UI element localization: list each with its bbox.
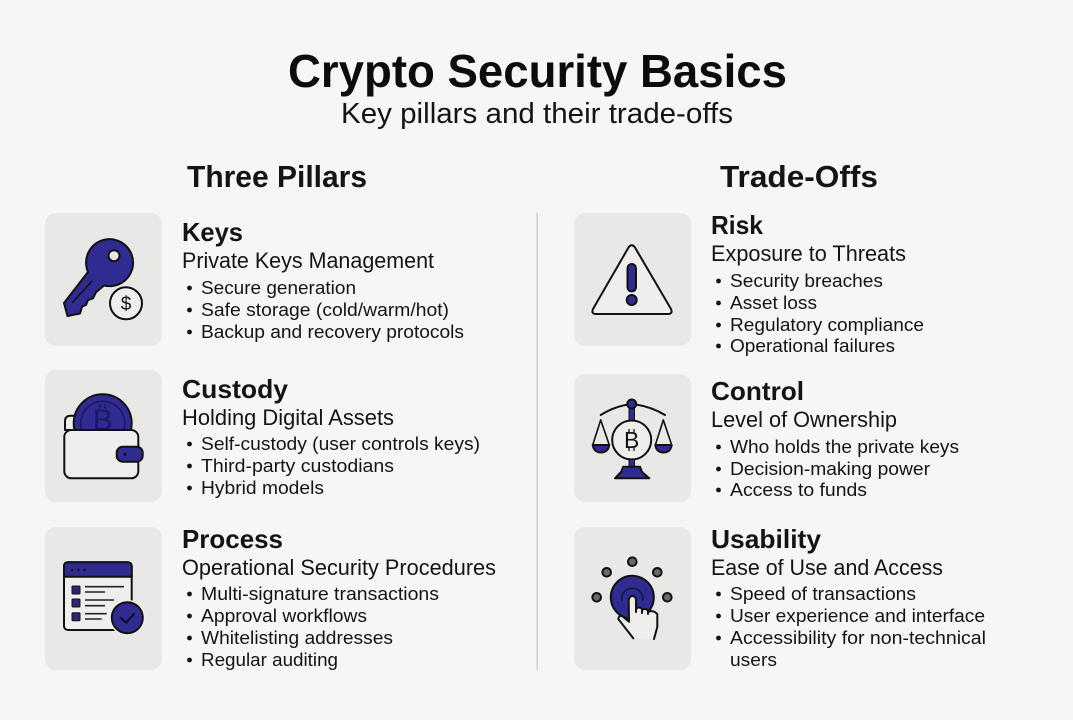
icon: wallet with bitcoin bbox=[45, 370, 162, 502]
icon: wallet with bitcoin: B bbox=[93, 404, 113, 437]
list: control bullets: Access to funds bbox=[730, 479, 867, 500]
icon: scales with bitcoin: B bbox=[624, 427, 639, 453]
icon: checklist window bbox=[45, 527, 162, 670]
list: keys bullets bbox=[187, 277, 464, 342]
panel: usability bbox=[574, 524, 986, 670]
text: process heading: Process bbox=[182, 524, 283, 554]
text: control subtitle: Level of Ownership bbox=[711, 407, 897, 432]
list: custody bullets: Self-custody (user controls keys) bbox=[201, 433, 480, 454]
icon: scales with bitcoin bbox=[574, 374, 691, 502]
list: keys bullets: Backup and recovery protocols bbox=[201, 321, 464, 342]
subtitle: Key pillars and their trade-offs bbox=[341, 98, 733, 130]
list: process bullets: Approval workflows bbox=[201, 605, 367, 626]
text: keys subtitle: Private Keys Management bbox=[182, 248, 434, 273]
list: usability bullets: User experience and interface bbox=[730, 605, 985, 626]
list: control bullets bbox=[716, 436, 959, 500]
text: risk subtitle: Exposure to Threats bbox=[711, 241, 906, 266]
icon: touch button bbox=[574, 527, 691, 670]
list: control bullets: Who holds the private keys bbox=[730, 436, 959, 457]
text: custody heading: Custody bbox=[182, 374, 289, 404]
list: usability bullets: Speed of transactions bbox=[730, 583, 916, 604]
panel: process bbox=[45, 524, 496, 670]
panel: keys bbox=[45, 213, 464, 346]
list: risk bullets: Operational failures bbox=[730, 335, 895, 356]
list: process bullets bbox=[187, 583, 439, 670]
panel: risk bbox=[574, 210, 924, 356]
list: custody bullets: Third-party custodians bbox=[201, 455, 394, 476]
text: risk heading: Risk bbox=[711, 210, 764, 240]
heading: three pillars: Three Pillars bbox=[187, 159, 367, 194]
list: keys bullets: Safe storage (cold/warm/hot) bbox=[201, 299, 449, 320]
text: usability subtitle: Ease of Use and Access bbox=[711, 555, 943, 580]
list: usability bullets: Accessibility for non-technical bbox=[730, 627, 986, 648]
list: process bullets: Whitelisting addresses bbox=[201, 627, 393, 648]
list: risk bullets: Regulatory compliance bbox=[730, 314, 924, 335]
list: control bullets: Decision-making power bbox=[730, 458, 930, 479]
panel: control bbox=[574, 374, 959, 502]
text: custody subtitle: Holding Digital Assets bbox=[182, 405, 394, 430]
list: usability bullets: users bbox=[730, 649, 777, 670]
list: risk bullets bbox=[716, 270, 924, 356]
heading: trade-offs: Trade-Offs bbox=[720, 159, 878, 194]
text: usability heading: Usability bbox=[711, 524, 822, 554]
list: process bullets: Regular auditing bbox=[201, 649, 338, 670]
list: process bullets: Multi-signature transactions bbox=[201, 583, 439, 604]
list: keys bullets: Secure generation bbox=[201, 277, 356, 298]
panel: custody bbox=[45, 370, 480, 502]
title: Crypto Security Basics bbox=[288, 45, 787, 97]
list: risk bullets: Security breaches bbox=[730, 270, 883, 291]
icon: warning triangle bbox=[574, 213, 691, 346]
list: usability bullets bbox=[716, 583, 986, 670]
text: control heading: Control bbox=[711, 376, 804, 406]
icon: key and coin: $ bbox=[121, 294, 132, 315]
text: keys heading: Keys bbox=[182, 217, 243, 247]
list: risk bullets: Asset loss bbox=[730, 292, 817, 313]
icon: key and coin bbox=[45, 213, 162, 346]
list: custody bullets bbox=[187, 433, 480, 498]
text: process subtitle: Operational Security Procedures bbox=[182, 555, 496, 580]
list: custody bullets: Hybrid models bbox=[201, 477, 324, 498]
